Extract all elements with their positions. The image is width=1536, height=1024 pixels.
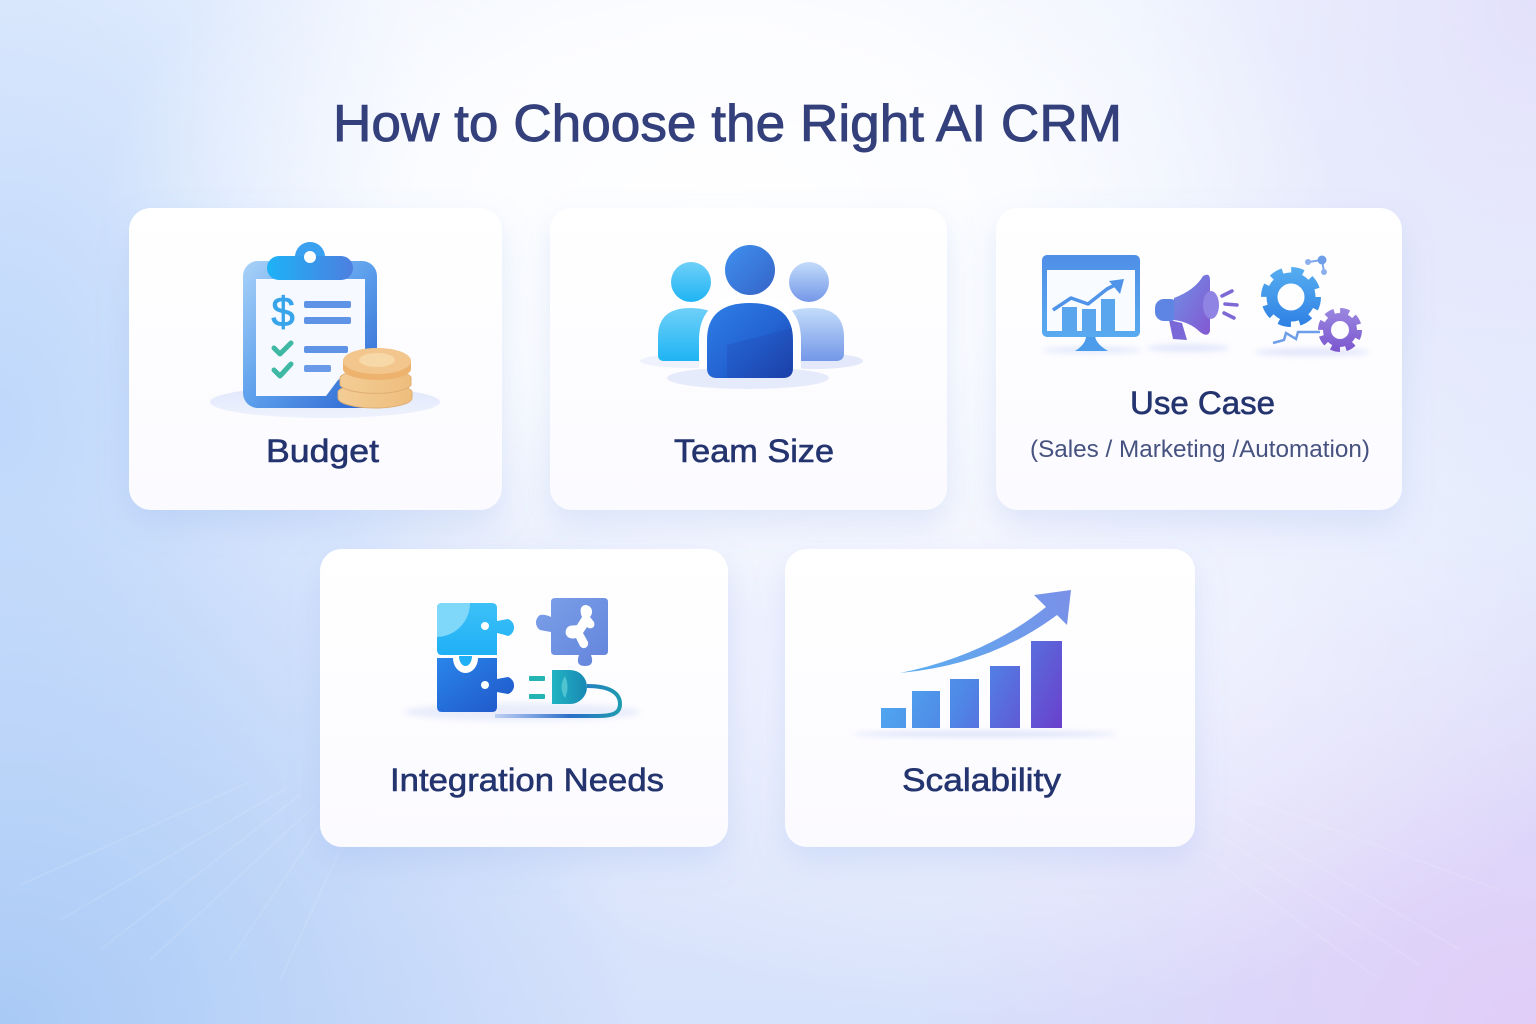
background perspective lines: [20, 782, 1500, 980]
icon: sales monitor with chart: [1042, 255, 1142, 353]
icon: growth bar chart with arrow: [853, 590, 1117, 736]
icon: budget clipboard and coins: [210, 242, 440, 418]
icon: team of three people: [640, 245, 863, 389]
subtitle: use case options: (Sales / Marketing /Automation): [1030, 436, 1370, 463]
panel: scalability: [785, 549, 1195, 847]
icon: automation gears: [1254, 256, 1370, 356]
title: How to Choose the Right AI CRM: [333, 95, 1122, 153]
panel: budget: [129, 208, 502, 510]
label: budget: Budget: [266, 433, 379, 469]
label: scalability: Scalability: [902, 762, 1061, 798]
icon: puzzle pieces and plug: [404, 598, 640, 721]
icon: budget clipboard and coins: $: [271, 288, 295, 335]
panel: team size: [550, 208, 947, 510]
label: use case: Use Case: [1130, 385, 1275, 421]
icon: marketing megaphone: [1146, 275, 1237, 352]
label: team size: Team Size: [674, 433, 834, 469]
panel: use case: [996, 208, 1402, 510]
panel: integration needs: [320, 549, 728, 847]
label: integration needs: Integration Needs: [390, 762, 664, 798]
